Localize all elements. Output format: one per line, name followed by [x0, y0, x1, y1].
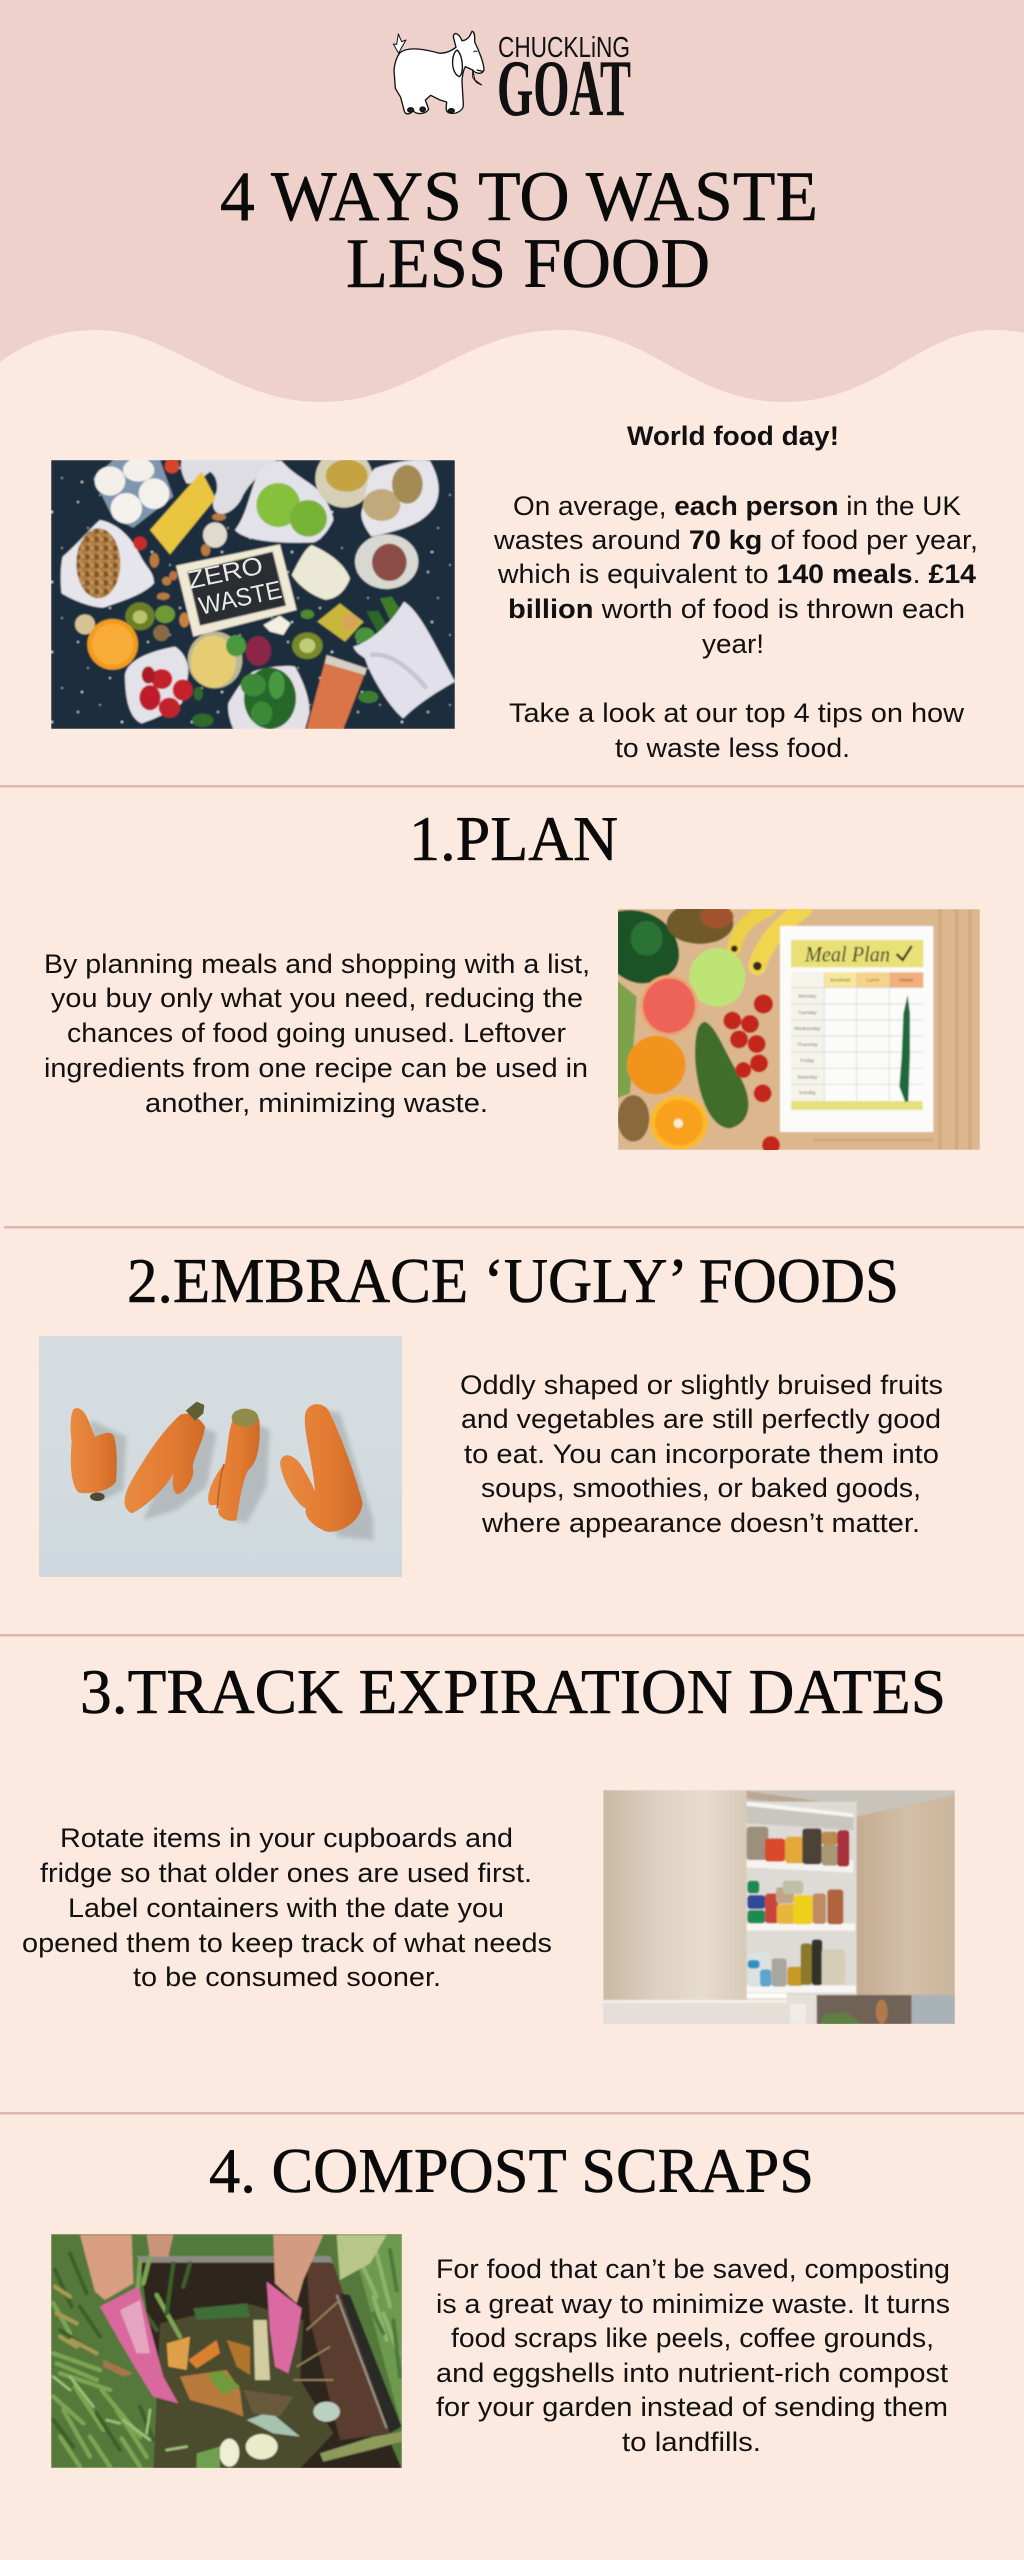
photo: zero waste groceries	[51, 449, 455, 729]
text: plan: another, minimizing waste.	[145, 1088, 488, 1118]
heading: 2 embrace ugly foods: 2.EMBRACE ‘UGLY’ FOODS	[127, 1245, 899, 1316]
text: compost: for your garden instead of sending them	[436, 2392, 948, 2422]
text: expiration dates: Label containers with the date you	[68, 1893, 504, 1923]
intro heading: World food day!	[627, 421, 839, 451]
chalkboard label: WASTE	[196, 576, 284, 621]
left grass blades	[53, 2253, 190, 2467]
photo: meal plan with fruit: Breakfast	[830, 977, 851, 982]
text: ugly foods: to eat. You can incorporate them into	[464, 1439, 939, 1469]
text: compost: is a great way to minimize waste. It turns	[436, 2289, 950, 2319]
heading: 3 track expiration dates: 3.TRACK EXPIRATION DATES	[80, 1656, 946, 1727]
right grass	[360, 2250, 400, 2377]
intro call to action	[509, 698, 965, 763]
title: LESS FOOD	[346, 225, 710, 303]
photo: kitchen cupboard	[603, 1790, 955, 2024]
arms	[80, 2235, 133, 2300]
icon: goat	[393, 31, 484, 114]
intro paragraph: year!	[702, 629, 764, 659]
photo: meal plan with fruit	[617, 903, 980, 1154]
text: expiration dates: Rotate items in your cupboards and	[60, 1823, 513, 1853]
sign frame	[176, 544, 297, 637]
text: plan: you buy only what you need, reducing the	[51, 983, 583, 1013]
text: ugly foods: Oddly shaped or slightly bruised fruits	[460, 1370, 943, 1400]
heading: 4 compost scraps: 4. COMPOST SCRAPS	[209, 2135, 814, 2206]
intro paragraph: On average, each person in the UK	[513, 491, 961, 521]
intro paragraph	[493, 491, 978, 659]
gloves	[100, 2287, 178, 2403]
text: plan	[44, 949, 590, 1118]
text: compost	[436, 2254, 950, 2457]
text: plan: chances of food going unused. Leftover	[67, 1018, 566, 1048]
text: compost: For food that can’t be saved, composting	[436, 2254, 950, 2284]
intro paragraph: which is equivalent to 140 meals . £14	[497, 559, 976, 589]
photo: meal plan with fruit: Dinner	[899, 977, 914, 982]
text: expiration dates: to be consumed sooner.	[133, 1962, 441, 1992]
photo: meal plan with fruit: Meal Plan	[804, 942, 890, 967]
chalkboard label: ZERO	[185, 552, 265, 595]
photo: meal plan with fruit: Thursday	[797, 1042, 818, 1048]
photo: meal plan with fruit: Saturday	[797, 1074, 818, 1080]
intro paragraph: billion worth of food is thrown each	[508, 594, 965, 624]
photo: meal plan with fruit: Sunday	[799, 1090, 816, 1096]
text: expiration dates: opened them to keep track of what needs	[22, 1928, 552, 1958]
photo: meal plan with fruit: Monday	[798, 993, 817, 999]
logo: Chuckling Goat	[393, 31, 631, 133]
text: compost: to landfills.	[622, 2427, 761, 2457]
text: ugly foods	[460, 1370, 943, 1538]
title	[220, 158, 818, 303]
intro text block	[493, 421, 978, 763]
intro call to action: Take a look at our top 4 tips on how	[509, 698, 965, 728]
photo: meal plan with fruit: Tuesday	[798, 1010, 817, 1016]
text: ugly foods: and vegetables are still perfectly good	[461, 1404, 941, 1434]
chalkboard label	[188, 558, 282, 614]
photo: ugly carrots	[39, 1336, 402, 1577]
text: plan: By planning meals and shopping with a list,	[44, 949, 590, 979]
intro call to action: to waste less food.	[615, 733, 850, 763]
logo wordmark bottom: GOAT	[497, 45, 631, 133]
photo: meal plan with fruit: Friday	[800, 1058, 815, 1064]
carrots	[71, 1402, 363, 1532]
title: 4 WAYS TO WASTE	[220, 158, 818, 236]
text: ugly foods: where appearance doesn’t matter.	[481, 1508, 920, 1538]
text: compost: food scraps like peels, coffee grounds,	[451, 2323, 934, 2353]
text: compost: and eggshells into nutrient-rich compost	[436, 2358, 949, 2388]
photo: meal plan with fruit: Wednesday	[794, 1026, 821, 1032]
text: expiration dates	[22, 1823, 552, 1992]
heading: 1 plan: 1.PLAN	[409, 803, 618, 874]
photo: meal plan with fruit: Lunch	[867, 977, 880, 982]
text: plan: ingredients from one recipe can be used in	[44, 1053, 588, 1083]
header band with wavy edge	[0, 0, 1024, 402]
intro paragraph: wastes around 70 kg of food per year,	[493, 525, 978, 555]
text: expiration dates: fridge so that older ones are used first.	[40, 1858, 532, 1888]
logo wordmark top: CHUCKLiNG	[498, 32, 630, 64]
food scraps	[193, 2303, 250, 2320]
photo: compost bin with gloved hands	[51, 2234, 402, 2468]
text: ugly foods: soups, smoothies, or baked goods,	[481, 1473, 921, 1503]
carrot shadows	[90, 1407, 373, 1540]
